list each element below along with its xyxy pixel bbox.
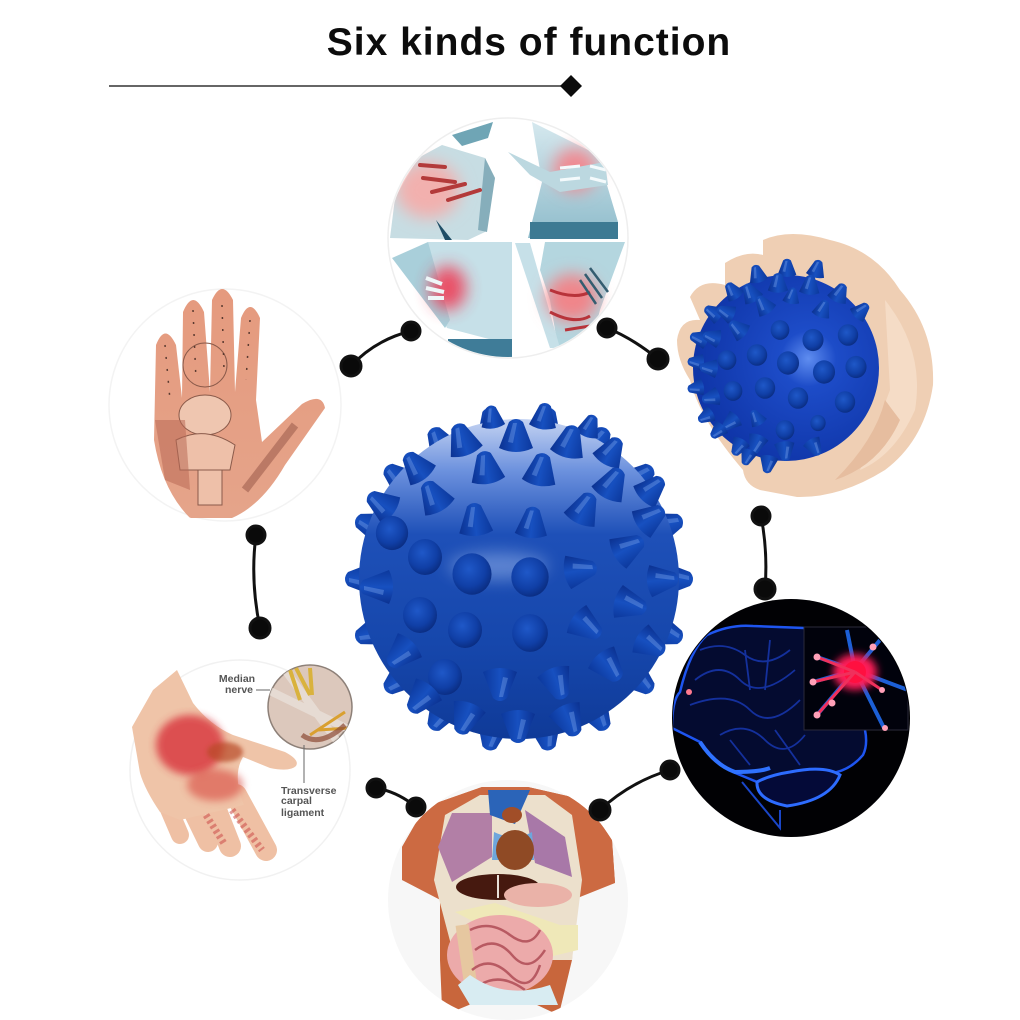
- connector: organs to wrist: [367, 779, 425, 816]
- brain: [672, 626, 866, 828]
- image: pain areas collage: [388, 118, 628, 359]
- image: reflexology hand: [109, 289, 341, 521]
- connector: brain to organs: [590, 761, 679, 820]
- ball body: [359, 419, 679, 739]
- fingers: [165, 795, 266, 850]
- ball spikes: [686, 258, 874, 475]
- connector: wrist to left hand: [247, 526, 270, 638]
- inset: nerve detail: [256, 665, 352, 783]
- hand: [677, 234, 933, 497]
- image: carpal tunnel hand: [130, 660, 352, 880]
- central spiked ball: [345, 401, 693, 753]
- label: median nerve: Median: [219, 673, 255, 685]
- label: median nerve: nerve: [225, 684, 253, 696]
- connector: top to left hand: [341, 322, 420, 376]
- ball body: [693, 275, 879, 461]
- surface spikes: [359, 401, 680, 743]
- title rule with diamond: [109, 75, 582, 97]
- label: transverse carpal ligament: carpal: [281, 795, 312, 807]
- neuron inset: [804, 627, 908, 731]
- connectors: [247, 319, 775, 820]
- specular highlight: [448, 552, 548, 580]
- connector: top to grip: [598, 319, 668, 369]
- label: transverse carpal ligament: Transverse: [281, 785, 337, 797]
- connector: grip to brain: [752, 507, 775, 599]
- palm: [132, 670, 297, 820]
- title: Six kinds of function: [327, 21, 731, 64]
- image: brain and neuron: [672, 599, 910, 837]
- rim spikes: [345, 405, 693, 753]
- image: internal organs: [402, 787, 615, 1012]
- image: ball gripped in hand: [677, 234, 933, 497]
- label: transverse carpal ligament: ligament: [281, 807, 325, 819]
